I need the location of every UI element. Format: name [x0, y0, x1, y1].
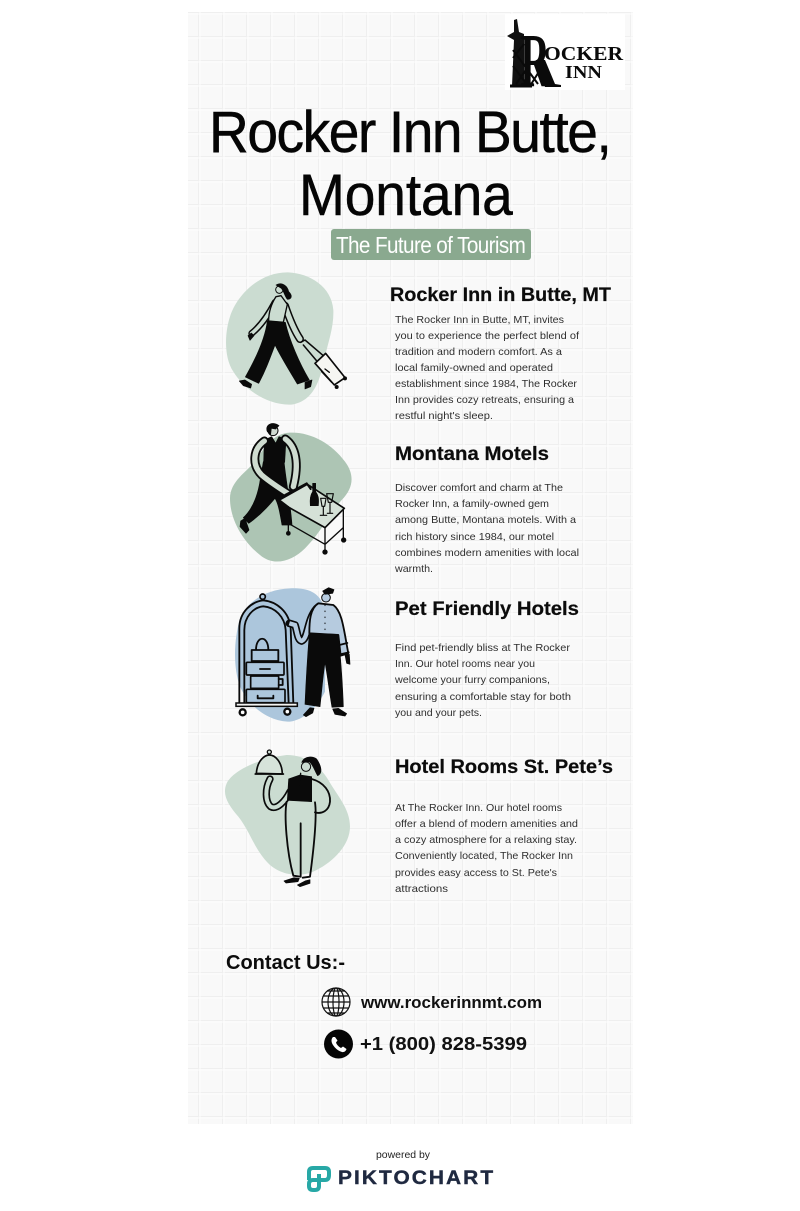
section 1: Rocker Inn in Butte, MT: Rocker Inn in Butte, MT	[390, 285, 611, 306]
panel: grid paper background	[188, 12, 633, 1124]
footer: powered by: powered by	[376, 1149, 431, 1161]
section 2: Montana Motels: among Butte, Montana motels. With a	[395, 515, 576, 526]
section 2: Montana Motels: Rocker Inn, a family-owned gem	[395, 499, 549, 510]
section 1: Rocker Inn in Butte, MT: The Rocker Inn in Butte, MT, invites	[395, 315, 564, 326]
illustration: server with cloche	[225, 750, 350, 887]
section 1: Rocker Inn in Butte, MT: tradition and modern comfort. As a	[395, 347, 562, 358]
section 1: Rocker Inn in Butte, MT: local family-owned and operated	[395, 363, 553, 374]
title: Rocker Inn Butte,	[209, 100, 612, 164]
section 2: Montana Motels: Discover comfort and charm at The	[395, 483, 563, 494]
illustration: bellhop with luggage cart	[235, 588, 350, 722]
section 1: Rocker Inn in Butte, MT: you to experience the perfect blend of	[395, 331, 579, 342]
section 3: Pet Friendly Hotels: Find pet-friendly bliss at The Rocker	[395, 643, 571, 654]
section 3: Pet Friendly Hotels: Pet Friendly Hotels	[395, 599, 579, 620]
section 4: Hotel Rooms St. Pete's: Conveniently located, The Rocker Inn	[395, 851, 573, 862]
illustration: traveller with suitcase	[226, 272, 347, 405]
title	[209, 100, 612, 227]
footer: Piktochart logo: PIKTOCHART	[338, 1168, 493, 1189]
title: Montana	[299, 163, 513, 227]
section 3: Pet Friendly Hotels: you and your pets.	[395, 708, 482, 719]
website: www.rockerinnmt.com	[360, 993, 542, 1012]
logo: Rocker Inn: INN	[565, 62, 602, 82]
icon: phone	[324, 1030, 353, 1058]
section 4: Hotel Rooms St. Pete's: At The Rocker Inn. Our hotel rooms	[395, 803, 562, 814]
icon: globe	[322, 988, 350, 1016]
phone number: +1 (800) 828-5399	[360, 1033, 527, 1054]
section 4: Hotel Rooms St. Pete's: attractions	[395, 884, 448, 895]
logo: Rocker Inn: OCKER	[544, 43, 624, 65]
section 4: Hotel Rooms St. Pete's: a cozy atmosphere for a relaxing stay.	[395, 835, 577, 846]
logo: Rocker Inn: R	[520, 19, 551, 103]
contact heading: Contact Us:-	[226, 952, 345, 974]
section 1: Rocker Inn in Butte, MT	[390, 285, 611, 422]
section 2: Montana Motels: Montana Motels	[395, 444, 549, 465]
subtitle pill: The Future of Tourism	[336, 232, 526, 258]
section 4: Hotel Rooms St. Pete's: Hotel Rooms St. Pete’s	[395, 757, 613, 778]
section 3: Pet Friendly Hotels: ensuring a comfortable stay for both	[395, 692, 571, 703]
section 3: Pet Friendly Hotels: Inn. Our hotel rooms near you	[395, 659, 535, 670]
section 2: Montana Motels: combines modern amenities with local	[395, 548, 579, 559]
section 1: Rocker Inn in Butte, MT: Inn provides cozy retreats, ensuring a	[395, 395, 574, 406]
section 4: Hotel Rooms St. Pete's: provides easy access to St. Pete's	[395, 868, 557, 879]
section 4: Hotel Rooms St. Pete's	[395, 757, 613, 895]
section 2: Montana Motels: warmth.	[394, 564, 433, 575]
section 3: Pet Friendly Hotels: welcome your furry companions,	[394, 675, 550, 686]
section 2: Montana Motels	[394, 444, 579, 575]
illustration: waiter with drinks cart	[230, 424, 352, 562]
section 1: Rocker Inn in Butte, MT: establishment since 1984, The Rocker	[395, 379, 578, 390]
section 4: Hotel Rooms St. Pete's: offer a blend of modern amenities and	[395, 819, 578, 830]
logo: Rocker Inn	[505, 14, 625, 103]
section 1: Rocker Inn in Butte, MT: restful night's sleep.	[395, 411, 493, 422]
section 3: Pet Friendly Hotels	[394, 599, 579, 719]
section 2: Montana Motels: rich history since 1984, our motel	[395, 532, 554, 543]
